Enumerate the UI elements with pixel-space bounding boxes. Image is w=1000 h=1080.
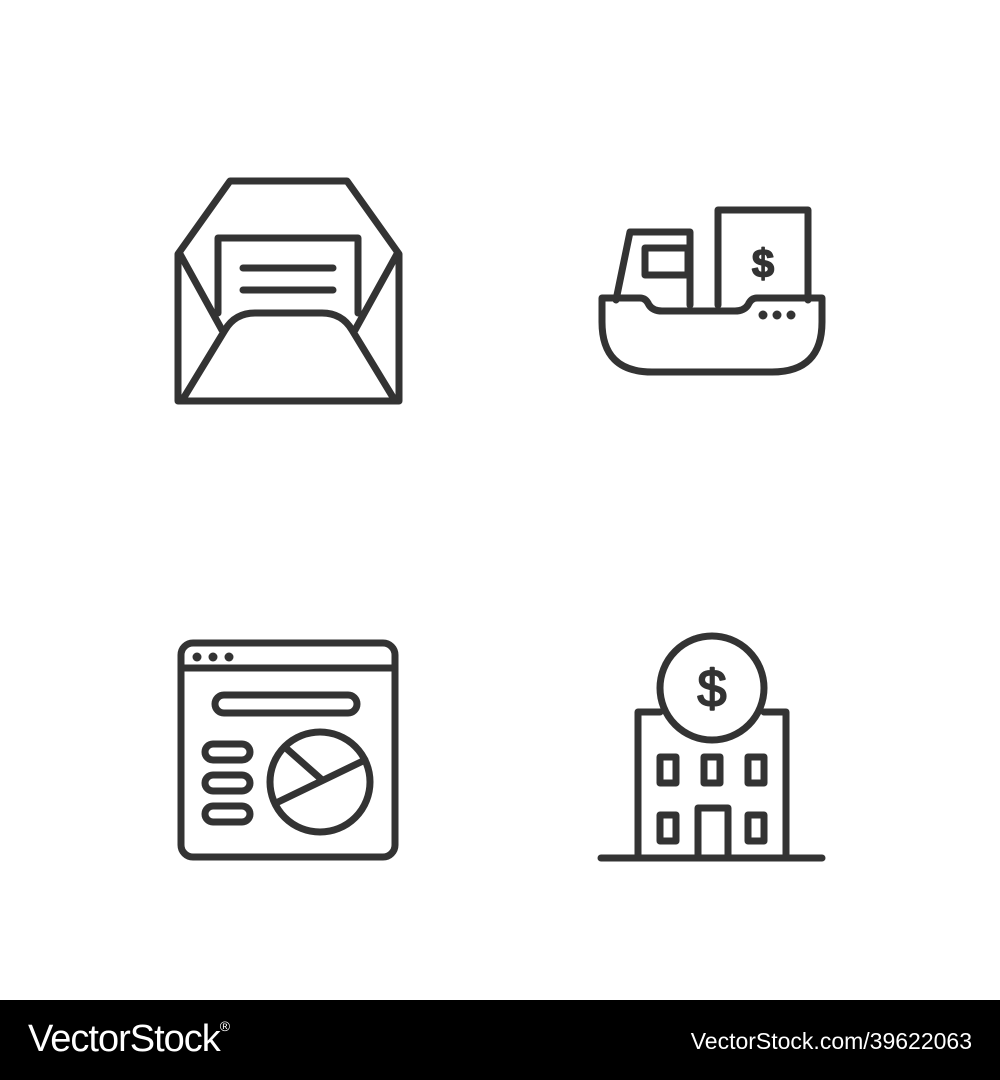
footer bar xyxy=(0,1000,1000,1080)
icon: cargo ship with dollar: $ xyxy=(752,242,774,286)
icon: bank building with dollar coin: $ xyxy=(698,660,727,718)
icon: web dashboard with pie chart xyxy=(181,643,395,857)
icon: bank building with dollar coin xyxy=(601,636,822,858)
icon: cargo ship with dollar xyxy=(602,210,822,372)
footer logo: VectorStock® xyxy=(28,1018,229,1060)
icon: open envelope xyxy=(178,181,399,401)
footer url: VectorStock.com/39622063 xyxy=(691,1028,972,1054)
